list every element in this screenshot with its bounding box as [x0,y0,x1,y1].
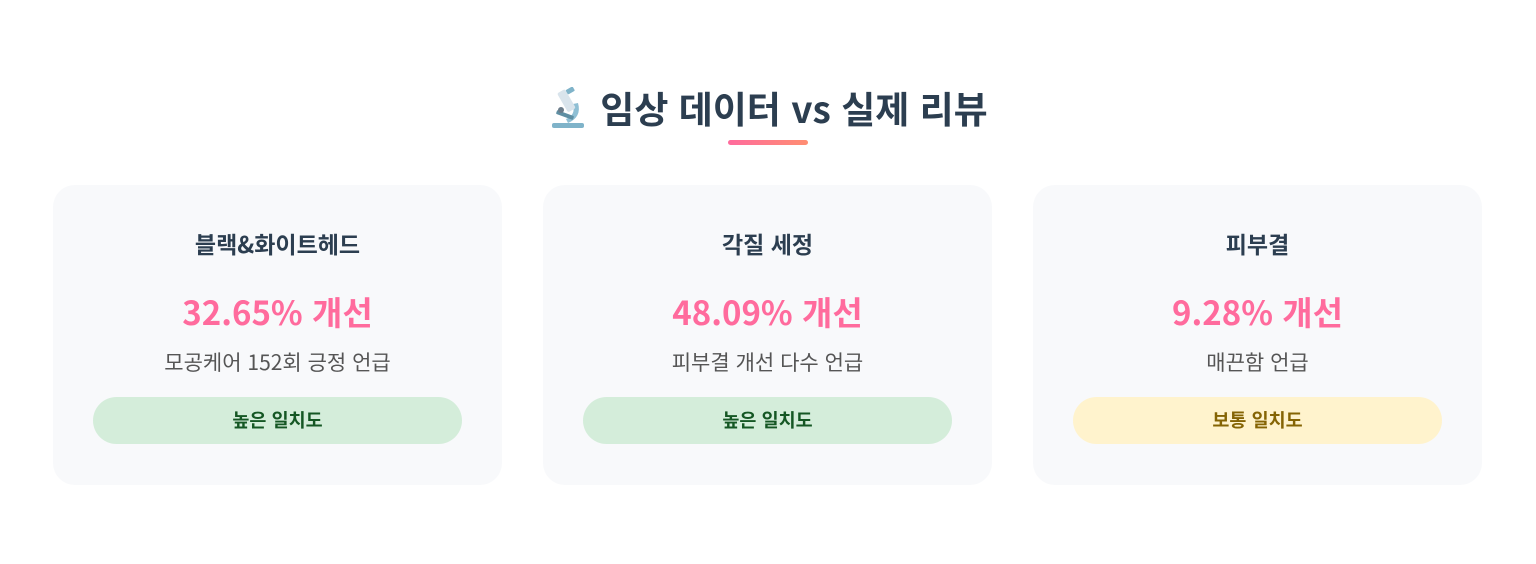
badge: high: 높은 일치도 [232,407,323,433]
badge: medium: 보통 일치도 [1212,407,1303,433]
description: 모공케어 152회 긍정 언급 [164,347,391,377]
percentage: 9.28% 개선 [1172,287,1343,335]
badge: high: 높은 일치도 [722,407,813,433]
panel: skin texture [1033,185,1482,485]
percentage: 32.65% 개선 [182,287,373,335]
card heading: 피부결 [1226,226,1289,260]
panel: blackhead [53,185,502,485]
badge: high [583,397,952,444]
badge: medium [1073,397,1442,444]
title: 임상 데이터 vs 실제 리뷰 [600,80,988,134]
panel: exfoliation [543,185,992,485]
description: 피부결 개선 다수 언급 [672,347,863,377]
badge: high [93,397,462,444]
card heading: 각질 세정 [722,226,813,260]
icon: microscope [552,87,584,128]
description: 매끈함 언급 [1206,347,1309,377]
title underline [728,140,808,145]
percentage: 48.09% 개선 [672,287,863,335]
card heading: 블랙&화이트헤드 [195,226,360,260]
